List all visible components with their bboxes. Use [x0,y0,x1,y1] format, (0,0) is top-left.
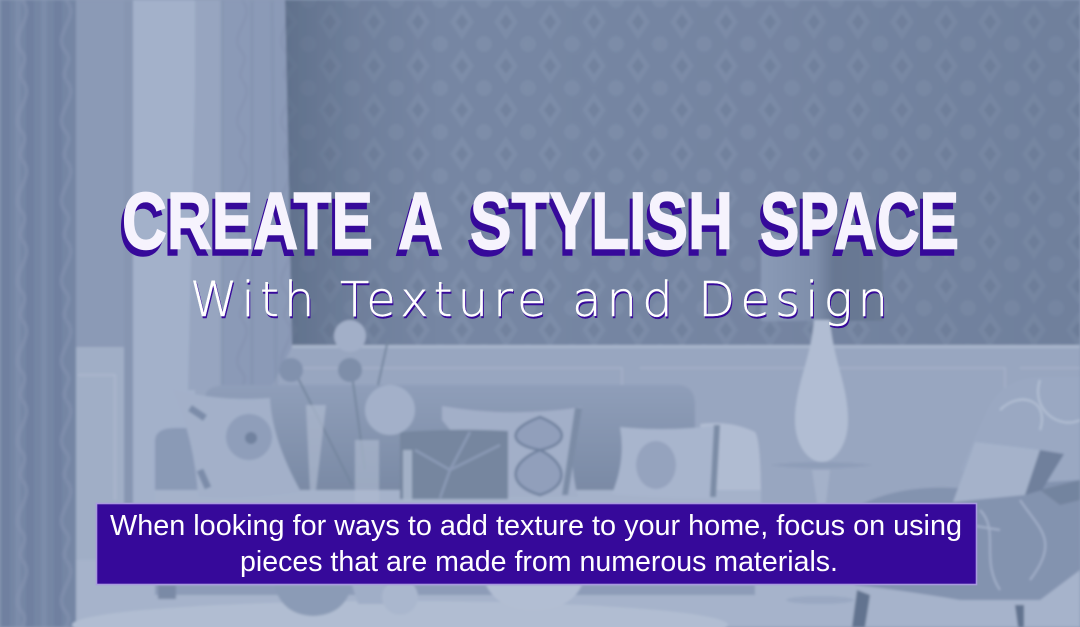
wallpaper [285,0,1080,347]
title: A [398,176,443,266]
callout text: pieces that are made from numerous materials. [240,546,838,578]
pillow: damask [612,425,720,498]
sofa [155,385,761,599]
title: CREATE [122,176,373,266]
wainscot panels [285,345,1080,507]
title: STYLISH [467,183,730,273]
pillow: dark patterned [400,430,508,499]
pillow: lattice [442,406,582,497]
title: SPACE [760,176,959,266]
left curtain [0,0,76,627]
window light and wall column [72,0,195,627]
side table [770,462,873,604]
title [119,176,959,273]
title: A [395,183,440,273]
coffee table and decor [72,579,728,627]
subtitle: With Texture and Design [191,274,889,330]
title: STYLISH [470,176,733,266]
title: SPACE [757,183,956,273]
sheer curtain [188,0,292,390]
armchair [852,377,1080,627]
pillow: floral [172,389,301,498]
table lamp [761,235,883,462]
flower arrangement [279,320,415,502]
callout box [96,504,976,584]
subtitle: With Texture and Design [190,272,888,328]
callout text: When looking for ways to add texture to your home, focus on using [110,510,962,542]
floor [76,560,1080,627]
callout text [110,510,962,578]
title: CREATE [119,183,370,273]
